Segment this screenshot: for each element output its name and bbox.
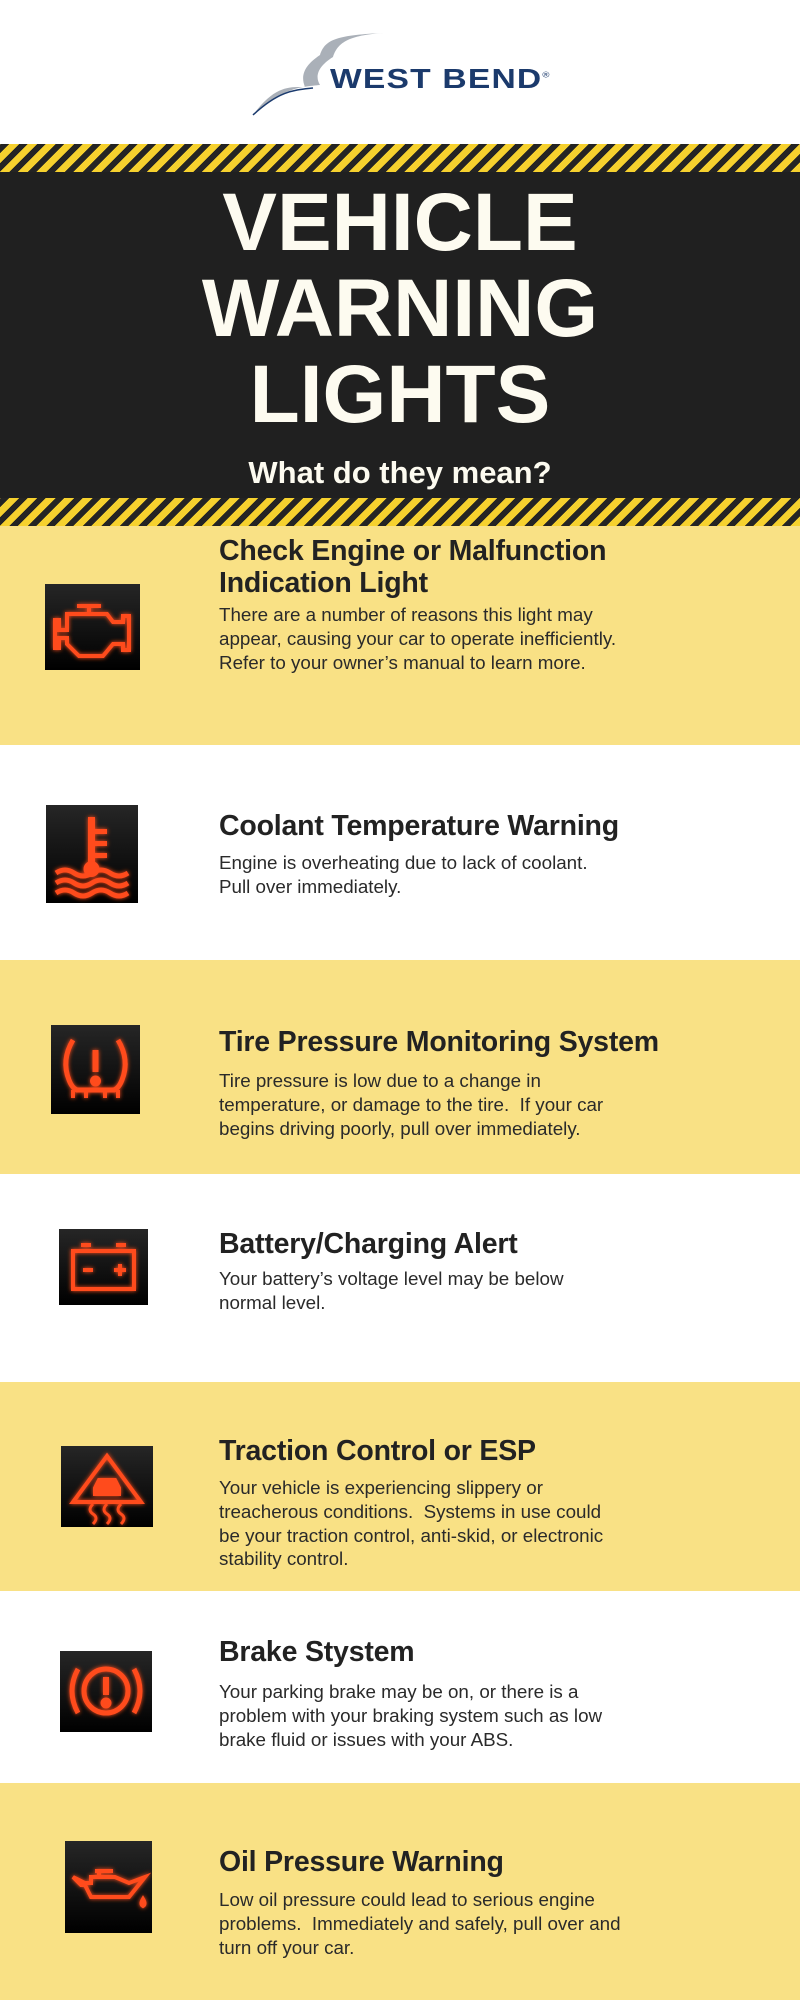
- text: [219, 852, 588, 897]
- icon: brake: [60, 1651, 152, 1732]
- text: treacherous conditions. Systems in use could: [219, 1501, 601, 1522]
- heading: Traction Control or ESP: [219, 1435, 536, 1467]
- text: begins driving poorly, pull over immediately.: [219, 1118, 581, 1139]
- icon: thermometer: [46, 805, 138, 903]
- panel: battery: [59, 1228, 564, 1313]
- icon: battery: [59, 1229, 148, 1305]
- heading: Indication Light: [219, 567, 428, 599]
- text: Engine is overheating due to lack of coolant.: [219, 852, 588, 873]
- logo: WEST BEND®: [330, 63, 551, 94]
- text: stability control.: [219, 1548, 348, 1569]
- text: be your traction control, anti-skid, or electronic: [219, 1525, 603, 1546]
- text: temperature, or damage to the tire. If your car: [219, 1094, 603, 1115]
- text: [219, 1268, 564, 1313]
- text: appear, causing your car to operate inefficiently.: [219, 628, 616, 649]
- text: Low oil pressure could lead to serious engine: [219, 1889, 595, 1910]
- text: Refer to your owner’s manual to learn more.: [219, 652, 586, 673]
- text: Your parking brake may be on, or there is a: [219, 1681, 578, 1702]
- subtitle: What do they mean?: [248, 455, 552, 490]
- panel: coolant: [46, 805, 619, 903]
- text: There are a number of reasons this light may: [219, 604, 593, 625]
- text: normal level.: [219, 1292, 325, 1313]
- logo: [252, 33, 551, 116]
- text: [219, 1681, 602, 1750]
- text: [219, 604, 616, 673]
- header panel: [0, 144, 800, 526]
- icon: oil can: [65, 1841, 152, 1933]
- text: [219, 1070, 603, 1139]
- icon: engine: [45, 584, 140, 670]
- text: [219, 1889, 621, 1958]
- title: VEHICLE: [222, 177, 578, 268]
- text: Your battery’s voltage level may be below: [219, 1268, 564, 1289]
- text: [219, 1477, 603, 1569]
- text: Tire pressure is low due to a change in: [219, 1070, 541, 1091]
- text: Pull over immediately.: [219, 876, 401, 897]
- icon: tire: [51, 1025, 140, 1114]
- panel: oil: [0, 1783, 800, 2000]
- panel: check engine: [0, 526, 800, 745]
- heading: [219, 535, 606, 599]
- panel: traction: [0, 1382, 800, 1591]
- text: problem with your braking system such as low: [219, 1705, 602, 1726]
- text: Your vehicle is experiencing slippery or: [219, 1477, 543, 1498]
- title: [202, 177, 598, 440]
- heading: Battery/Charging Alert: [219, 1228, 518, 1260]
- heading: Brake Stystem: [219, 1636, 414, 1668]
- heading: Tire Pressure Monitoring System: [219, 1026, 659, 1058]
- panel: tire pressure: [0, 960, 800, 1174]
- panel: brake: [60, 1636, 602, 1750]
- icon: traction: [61, 1446, 153, 1527]
- title: LIGHTS: [250, 349, 550, 440]
- text: brake fluid or issues with your ABS.: [219, 1729, 513, 1750]
- heading: Check Engine or Malfunction: [219, 535, 606, 567]
- heading: Oil Pressure Warning: [219, 1846, 504, 1878]
- heading: Coolant Temperature Warning: [219, 810, 619, 842]
- text: problems. Immediately and safely, pull over and: [219, 1913, 621, 1934]
- title: WARNING: [202, 263, 598, 354]
- text: turn off your car.: [219, 1937, 354, 1958]
